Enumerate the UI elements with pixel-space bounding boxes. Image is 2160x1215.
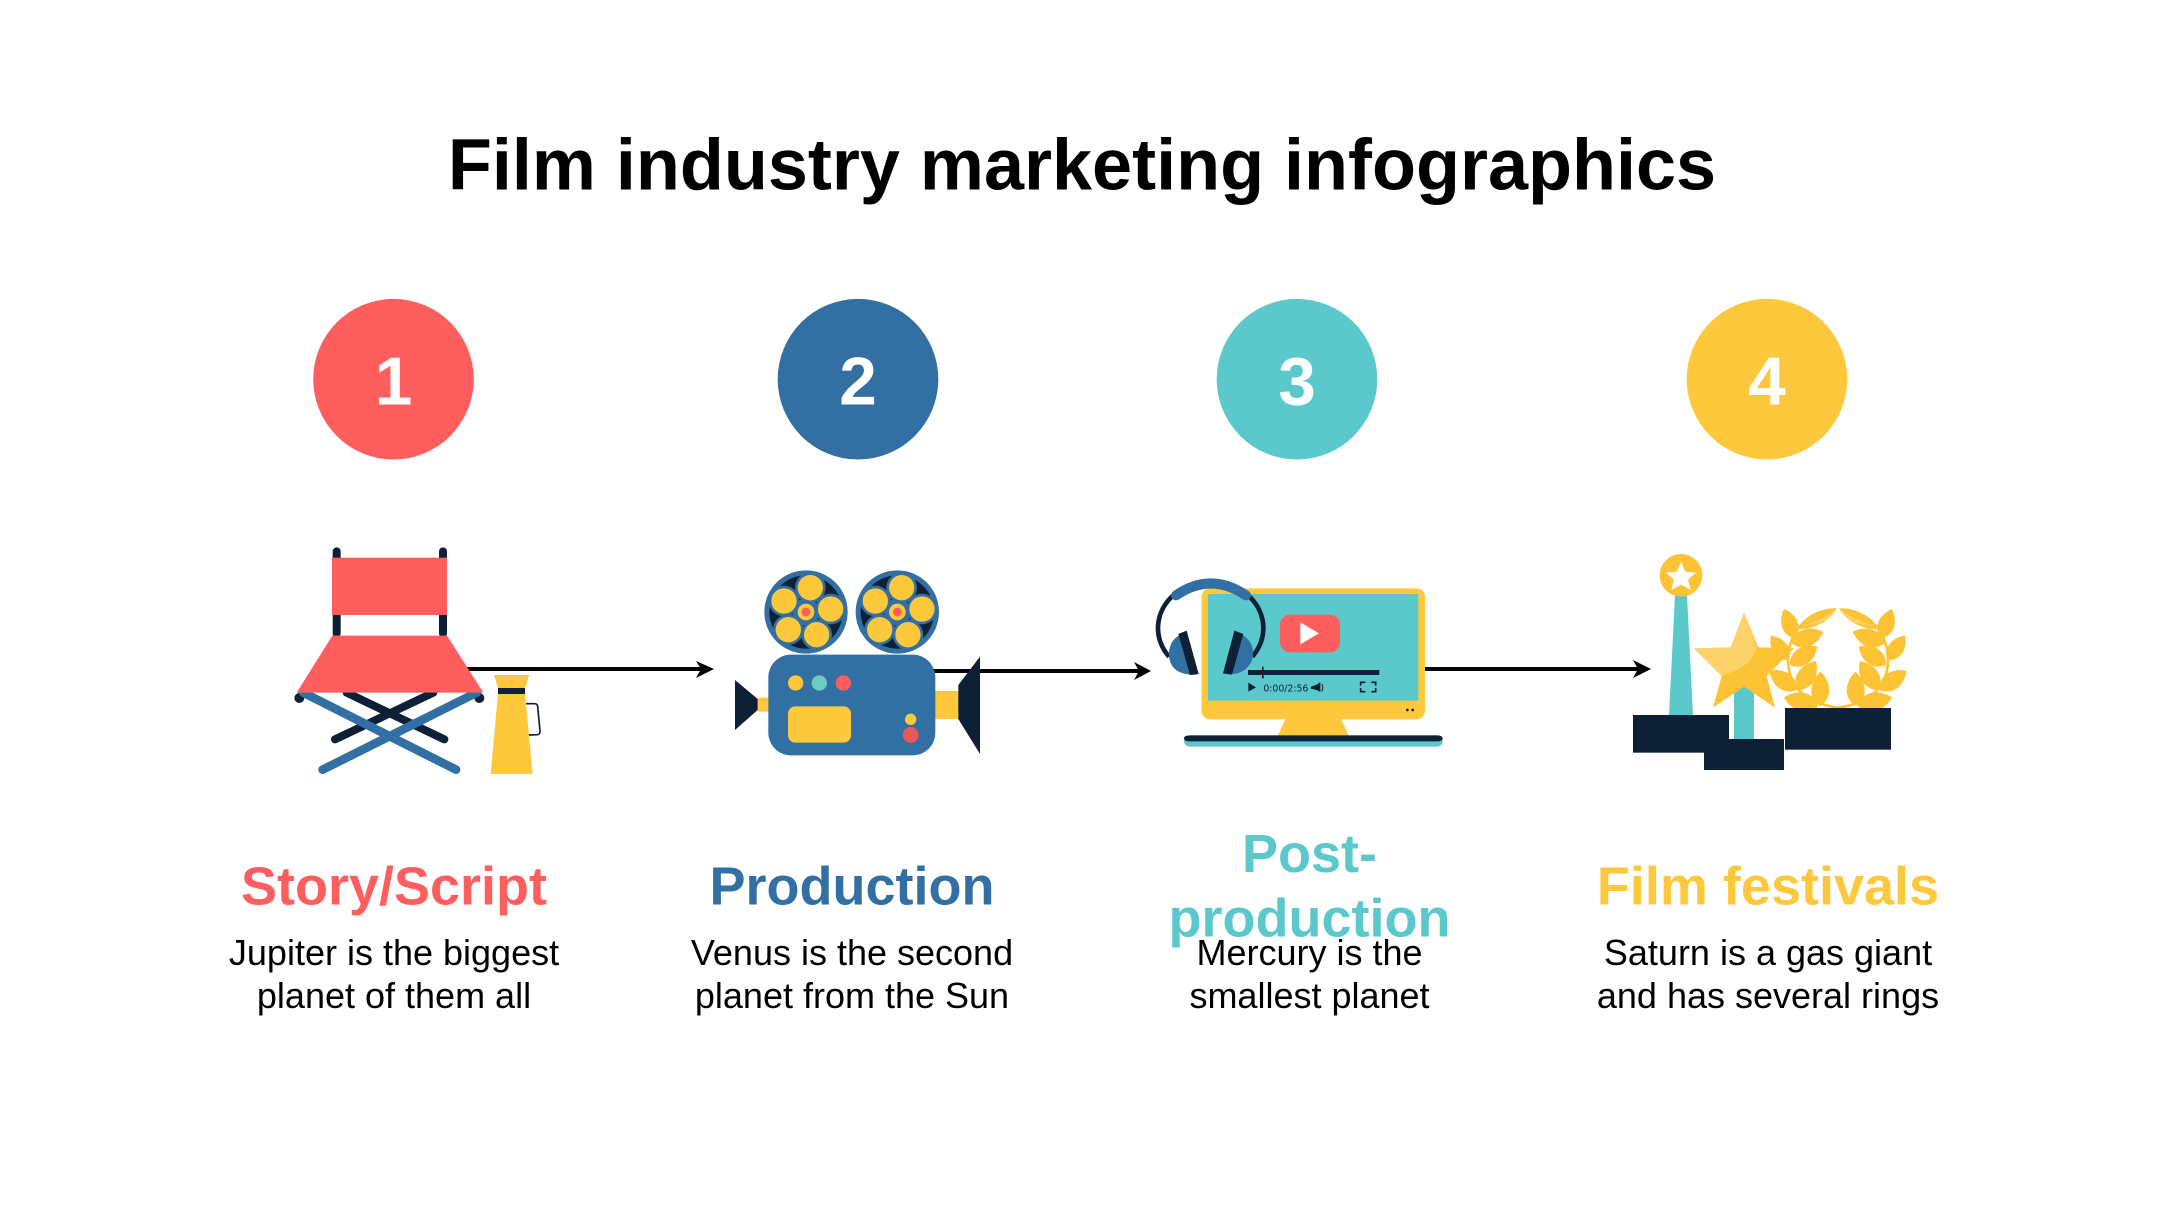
icon: monitor with video player and headphones: 0:00/2:56 (1263, 684, 1308, 695)
title: Film industry marketing infographics (448, 126, 1716, 206)
icon: film camera (735, 570, 980, 755)
arrow: step 2 to step 3 (933, 662, 1151, 680)
icon: monitor with video player and headphones (1158, 581, 1443, 747)
column 3 text: smallest planet (1189, 975, 1430, 1016)
arrow: step 3 to step 4 (1425, 660, 1651, 678)
number badge 1: 1 (375, 344, 412, 420)
column 1 text: Story/Script (241, 856, 547, 916)
number badge 2: 2 (839, 344, 877, 420)
number badge 4 (1687, 299, 1847, 460)
arrow: step 1 to step 2 (467, 661, 714, 678)
number badge 4: 4 (1748, 344, 1786, 420)
number badge 3 (1217, 299, 1377, 460)
column 1 text: Jupiter is the biggest (229, 932, 559, 973)
column 4 text: Film festivals (1597, 856, 1939, 916)
column 4 text: and has several rings (1597, 975, 1939, 1016)
column 1 text (229, 856, 559, 1016)
column 2 text: planet from the Sun (695, 975, 1009, 1016)
column 3 text: Mercury is the (1196, 932, 1423, 973)
column 4 text (1597, 856, 1939, 1016)
number badge 3: 3 (1278, 344, 1316, 420)
column 3 text: Post- (1242, 824, 1377, 884)
icon: film festival awards (1633, 554, 1912, 770)
icon: director chair and megaphone (294, 547, 540, 774)
column 2 text: Venus is the second (691, 932, 1013, 973)
column 4 text: Saturn is a gas giant (1604, 932, 1932, 973)
column 3 text: production (1169, 888, 1450, 948)
number badge 1 (313, 299, 474, 460)
column 3 text (1169, 824, 1450, 1016)
column 2 text (691, 856, 1013, 1016)
column 2 text: Production (710, 856, 994, 916)
column 1 text: planet of them all (257, 975, 531, 1016)
number badge 2 (778, 299, 938, 460)
